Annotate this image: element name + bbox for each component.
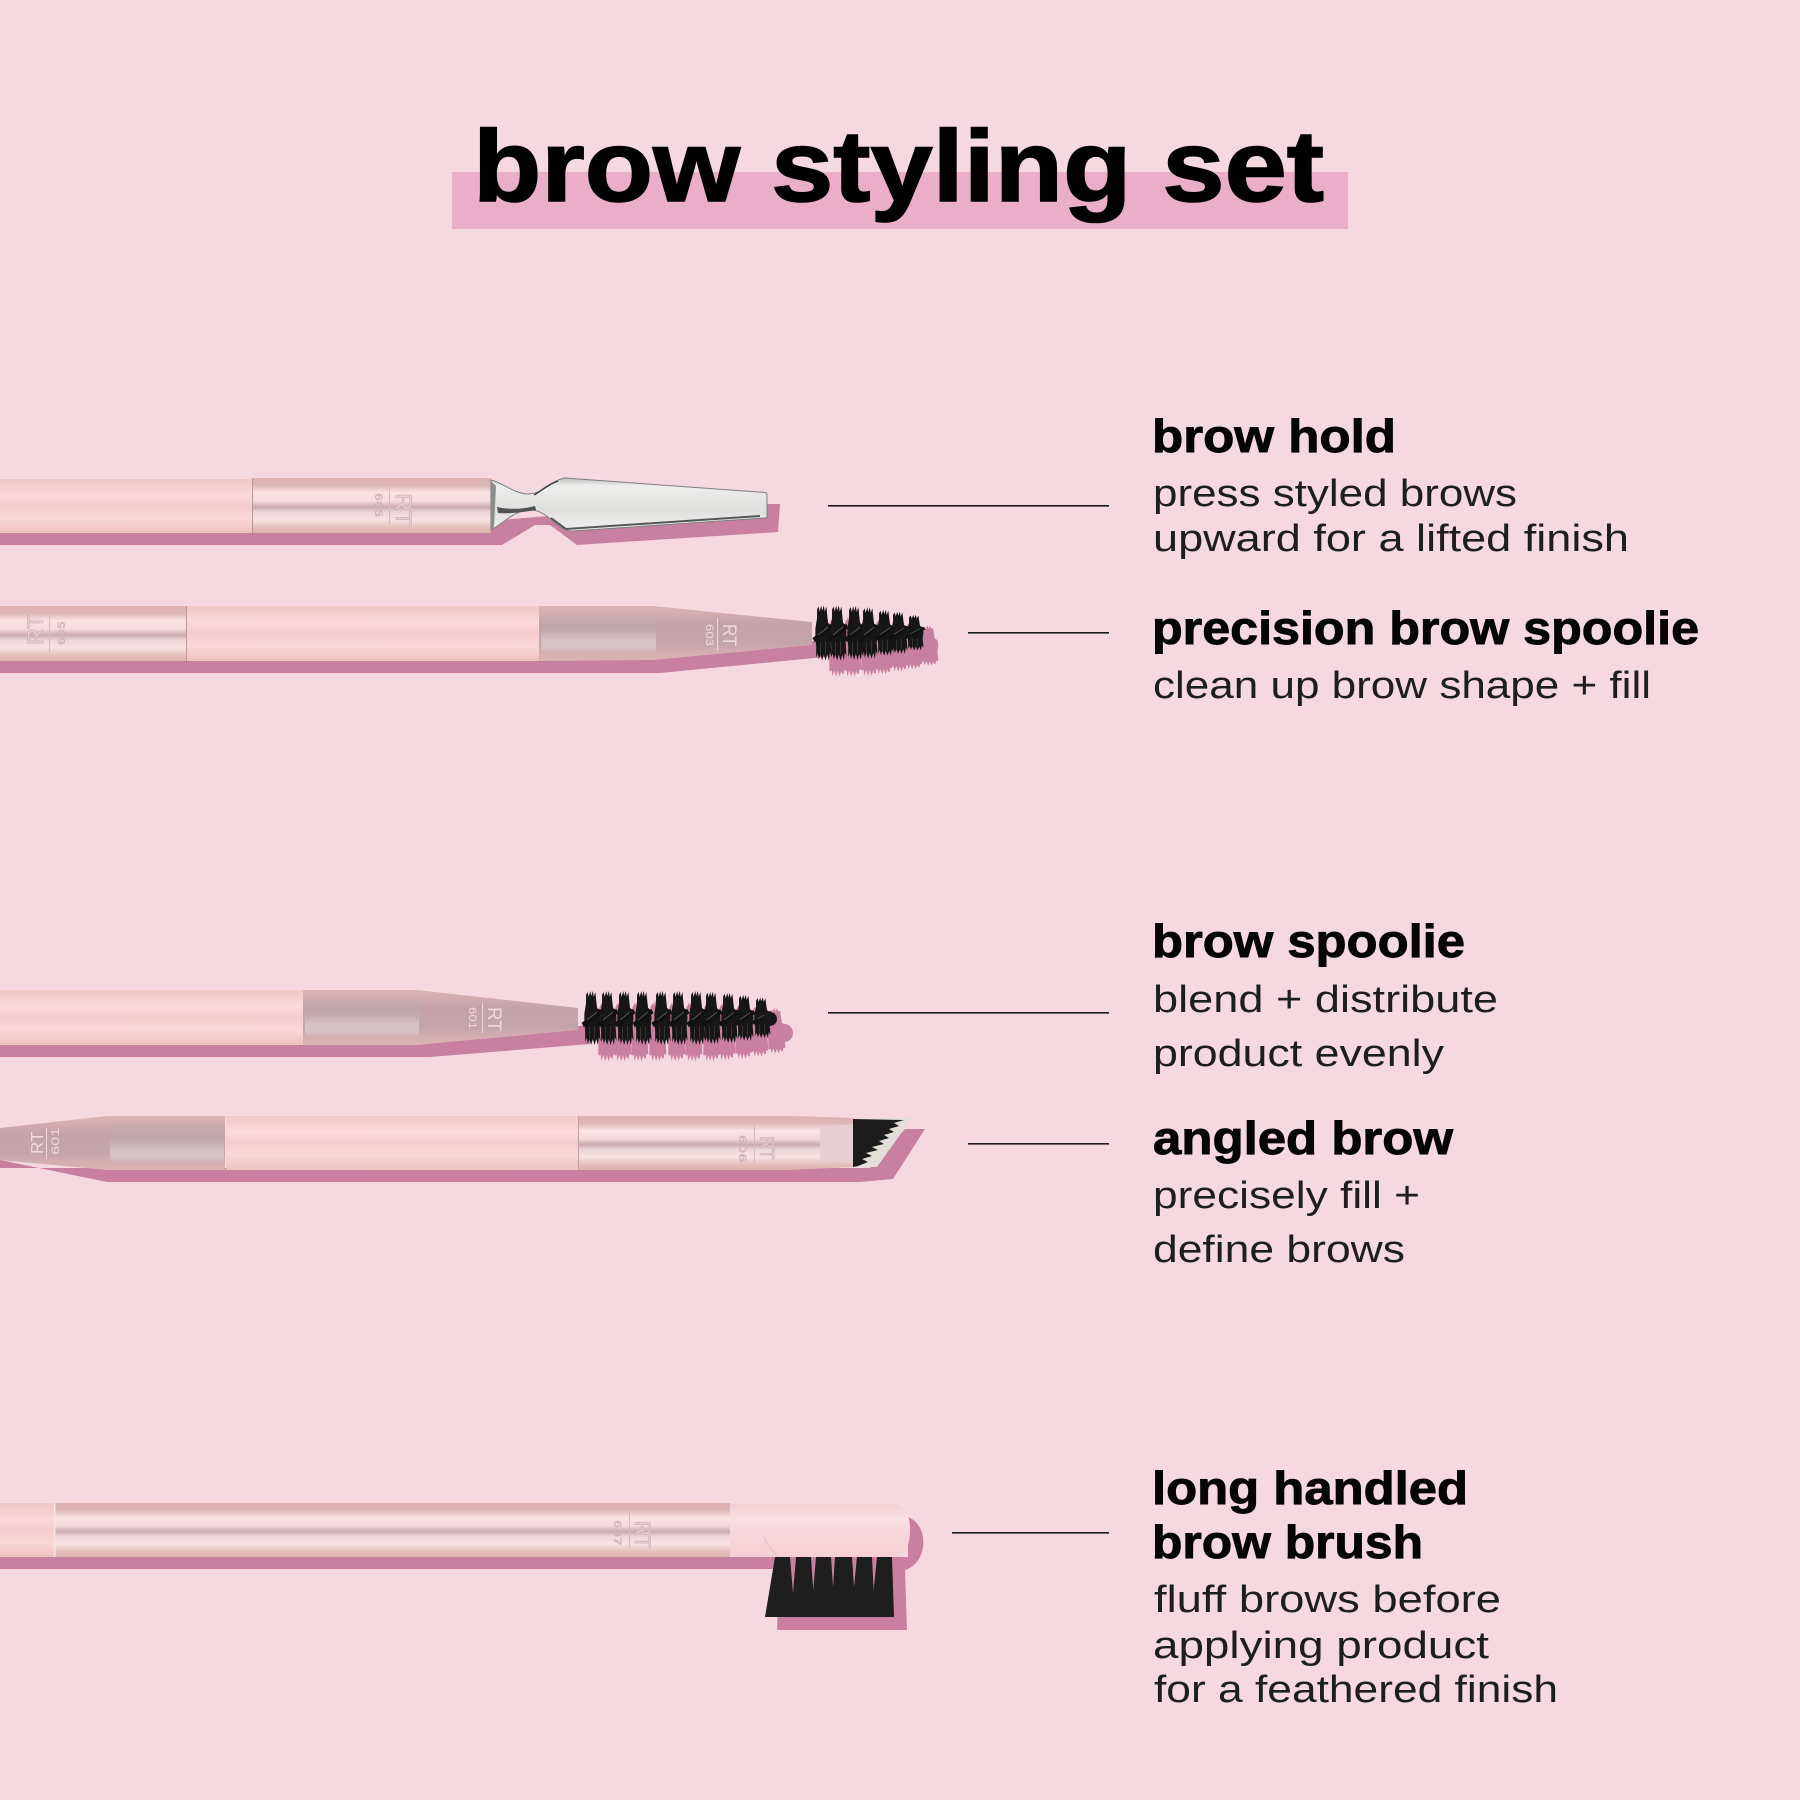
pale handle [226,1116,578,1170]
shadow [0,1129,925,1182]
metal handle section [55,1503,730,1557]
engraving 601 [27,1127,61,1159]
engraving 605: 605 [55,621,68,645]
engraving 603 [703,618,741,651]
engraving 601: RT [27,1131,47,1154]
leader line: brow spoolie [828,1012,1109,1014]
angled bristles [853,1118,912,1167]
label: precision brow spoolie: precision brow spoolie [1152,602,1699,654]
brush: angled brow [0,1116,925,1182]
tapered ferrule [539,606,812,661]
shadow [0,640,825,673]
engraving 607: 607 [612,1520,624,1546]
label: long handled brow brush: long handled [1152,1462,1468,1514]
label: long handled brow brush: fluff brows before [1154,1579,1501,1621]
engraving 605 [24,614,68,653]
title text: brow styling set [473,111,1324,223]
brush: brow spoolie [0,990,792,1058]
engraving 601: RT [483,1007,504,1032]
bristles [583,991,777,1045]
metal handle section [252,478,491,533]
engraving 605: RT [24,614,48,645]
tapered ferrule [303,990,578,1045]
leader line: angled brow [968,1143,1109,1145]
label: brow hold [1152,410,1629,560]
shadow [0,1025,590,1057]
label: brow hold: press styled brows [1153,473,1517,515]
brush: precision brow spoolie [0,605,938,674]
tapered metal section [0,1116,225,1170]
metal ferrule [578,1116,853,1170]
label: brow spoolie: blend + distribute [1153,979,1498,1021]
engraving 606: 606 [737,1135,749,1163]
leader line: long handled brow brush [952,1532,1109,1534]
ferrule highlight [820,1124,853,1162]
label: precision brow spoolie: clean up brow shape + fill [1153,665,1651,707]
bristle shadow [829,618,938,674]
shadow [0,504,780,545]
leader line: precision brow spoolie [968,632,1109,634]
label: angled brow: define brows [1153,1229,1405,1271]
pale cap [730,1504,910,1557]
title highlight band [452,172,1348,229]
engraving 603: RT [719,624,741,646]
brush: brow hold [0,478,780,545]
pale handle [187,606,539,661]
bristles [814,605,924,661]
engraving 603: 603 [703,624,716,646]
engraving 606: RT [755,1136,777,1160]
label: brow spoolie [1152,915,1498,1075]
label: long handled brow brush: for a feathered finish [1154,1669,1558,1711]
pale handle end [0,1503,55,1557]
engraving: RT [390,493,414,526]
engraving 607 [612,1512,654,1548]
leader line: brow hold [828,505,1109,507]
label: brow hold: brow hold [1152,410,1396,462]
pale handle [0,479,252,533]
engraving [372,485,414,526]
engraving 601: 601 [49,1127,61,1155]
brush: long handled brow brush [0,1503,923,1630]
label: long handled brow brush: applying product [1153,1625,1490,1667]
engraving 606 [737,1125,777,1163]
label: angled brow [1153,1112,1453,1271]
label: brow hold: upward for a lifted finish [1153,518,1629,560]
label: precision brow spoolie [1152,602,1699,707]
engraving 601: 601 [466,1007,479,1029]
bristle shadow [598,1004,792,1058]
engraving 601 [466,1003,504,1033]
pale handle [0,990,303,1045]
label: long handled brow brush [1152,1462,1558,1711]
engraving 607: RT [630,1521,654,1548]
label: brow spoolie: product evenly [1153,1033,1444,1075]
label: long handled brow brush: brow brush [1152,1516,1423,1568]
label: brow spoolie: brow spoolie [1152,915,1465,967]
shadow [0,1517,923,1630]
metal spatula tip [491,478,767,531]
bristle block [765,1557,894,1617]
label: angled brow: angled brow [1153,1112,1453,1164]
label: angled brow: precisely fill + [1153,1175,1420,1217]
engraving: 605 [372,493,385,517]
title [452,111,1348,229]
metal handle section [0,606,186,661]
